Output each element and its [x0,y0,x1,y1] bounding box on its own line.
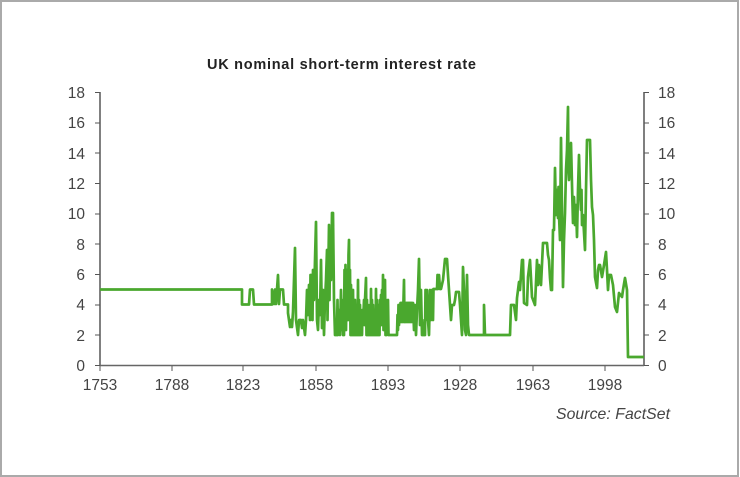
right axis [644,85,676,375]
right axis: 14 [658,146,676,163]
left axis: 18 [68,85,85,102]
left axis: 0 [76,358,85,375]
left axis: 16 [68,115,85,132]
left axis: 4 [76,297,85,314]
left axis: 6 [76,267,85,284]
line series: interest rate [100,107,644,357]
x axis: 1963 [516,377,550,394]
x axis: 1823 [226,377,260,394]
left axis: 8 [76,237,85,254]
source note: Source: FactSet [556,406,671,423]
left axis: 12 [68,176,85,193]
right axis: 4 [658,297,667,314]
x axis: 1753 [83,377,117,394]
right axis: 6 [658,267,667,284]
title: UK nominal short-term interest rate [207,57,476,73]
left axis: 10 [68,206,85,223]
left axis [68,85,100,375]
x axis [83,366,644,394]
x axis: 1788 [155,377,189,394]
x axis: 1893 [371,377,405,394]
left axis: 2 [76,328,85,345]
x axis: 1858 [299,377,333,394]
right axis: 8 [658,237,667,254]
right axis: 2 [658,328,667,345]
right axis: 16 [658,115,675,132]
right axis: 10 [658,206,676,223]
left axis: 14 [68,146,85,163]
right axis: 18 [658,85,675,102]
right axis: 0 [658,358,667,375]
right axis: 12 [658,176,675,193]
x axis: 1998 [588,377,622,394]
x axis: 1928 [443,377,477,394]
